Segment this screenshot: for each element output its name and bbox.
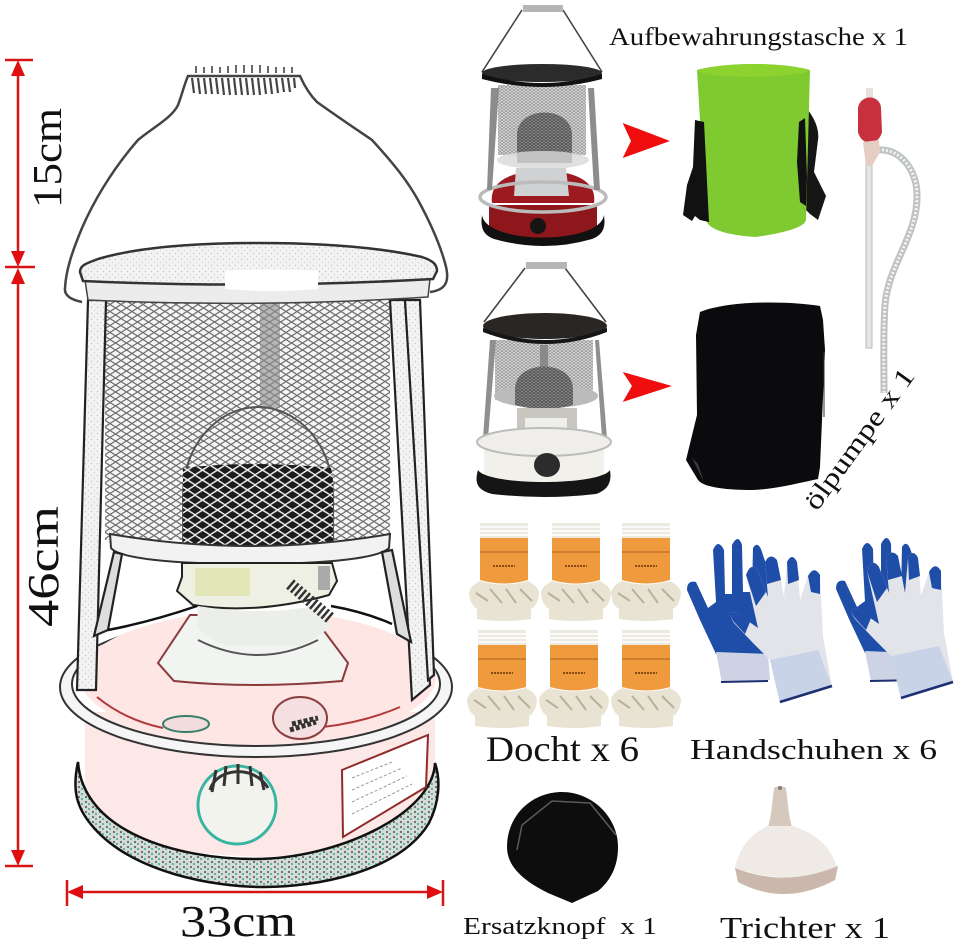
funnel <box>735 786 838 894</box>
dimension: 46cm height <box>5 268 68 866</box>
product: red heater <box>480 5 606 246</box>
arrow: red heater to green bag <box>623 123 670 158</box>
burner plate <box>158 615 348 685</box>
product: white heater <box>477 262 611 497</box>
tray ring <box>110 534 390 564</box>
filler caps <box>163 697 327 739</box>
label: Handschuhen x 6: Handschuhen x 6 <box>690 734 937 766</box>
coil spring <box>290 584 330 618</box>
dimension: 33cm width <box>67 880 443 946</box>
inner dome <box>183 407 333 543</box>
product: oil pump <box>858 88 917 393</box>
handle with spring grip <box>65 65 447 302</box>
top ring <box>85 279 430 303</box>
gloves: two pairs <box>687 538 953 703</box>
burner <box>177 563 337 608</box>
dimension: 15cm height <box>5 60 70 267</box>
strut guide line <box>108 606 392 630</box>
dimension: 46cm height: 46cm <box>19 506 68 627</box>
mesh cage <box>105 300 390 540</box>
neck under burner <box>197 606 331 646</box>
title: Aufbewahrungstasche x 1: Aufbewahrungstasche x 1 <box>609 24 908 51</box>
tank top <box>80 611 436 743</box>
label: Docht x 6: Docht x 6 <box>486 729 639 769</box>
product: green storage bag <box>683 64 826 237</box>
fuel tank body <box>85 712 435 857</box>
label: Ersatzknopf x 1: Ersatzknopf x 1 <box>463 914 657 940</box>
dimension: 33cm width: 33cm <box>180 897 296 946</box>
control knob <box>198 764 276 844</box>
base plate <box>75 762 438 887</box>
cage legs <box>77 300 434 700</box>
label: Trichter x 1: Trichter x 1 <box>720 910 890 945</box>
product: black storage bag <box>686 302 825 490</box>
label: ölpumpe x 1: ölpumpe x 1 <box>798 362 921 516</box>
tank data label <box>342 735 428 837</box>
guard ring <box>60 617 452 757</box>
dimension: 15cm height: 15cm <box>24 108 70 208</box>
spare knob <box>507 792 618 903</box>
wicks x 6 <box>467 523 681 728</box>
arrow: white heater to black bag <box>623 372 672 402</box>
line drawing: kerosene heater with dimensions <box>60 65 452 887</box>
